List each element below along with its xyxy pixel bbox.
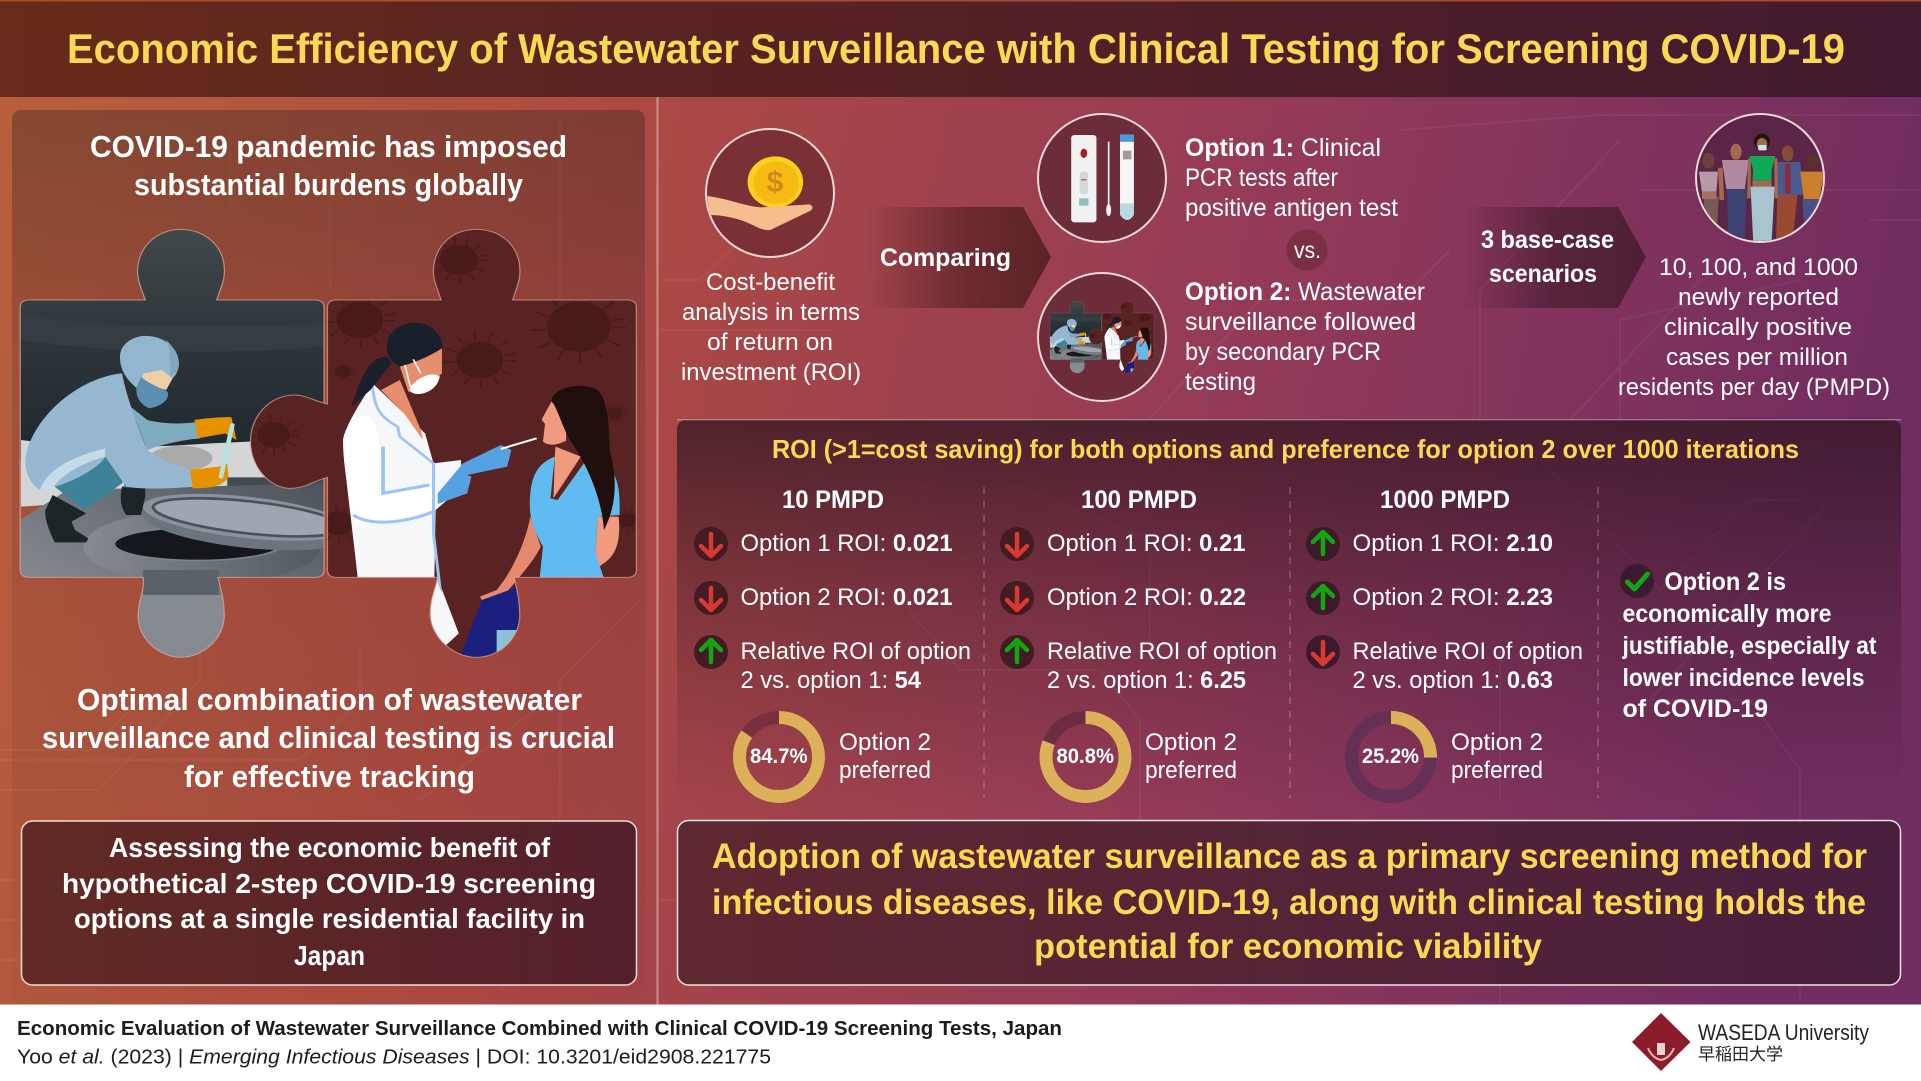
- column: 100 PMPD: [1000, 486, 1277, 796]
- icon: coin in hand: [706, 129, 834, 257]
- column: 10 PMPD: 10 PMPD: [782, 486, 884, 514]
- callout: study aim: Assessing the economic benefit of: [109, 832, 551, 863]
- column: 10 PMPD: Option 2: [839, 729, 931, 756]
- column: 10 PMPD: Option 2 ROI: 0.021: [740, 584, 952, 611]
- text: optimal combination: Optimal combination of wastewater: [77, 682, 582, 717]
- donut: 84.7 percent: 84.7%: [750, 745, 808, 768]
- column: 10 PMPD: Option 1 ROI: 0.021: [740, 530, 952, 557]
- callout: study aim: Japan: [294, 940, 365, 971]
- column: 1000 PMPD: preferred: [1451, 757, 1543, 784]
- text: option 2: by secondary PCR: [1185, 338, 1381, 366]
- arrow: comparing: [866, 207, 1051, 308]
- logo: Waseda University: WASEDA University: [1698, 1020, 1869, 1045]
- heading: pandemic burden: COVID-19 pandemic has imposed: [90, 129, 567, 164]
- heading: ROI results: ROI (>1=cost saving) for both options and preference for option 2 over 1000 iterations: [772, 434, 1799, 464]
- callout: study aim: hypothetical 2-step COVID-19 screening: [62, 868, 596, 899]
- text: option 1: Option 1: Clinical: [1185, 134, 1381, 162]
- text: scenario description: residents per day (PMPD): [1618, 374, 1890, 401]
- text: option 2: testing: [1185, 368, 1256, 396]
- icon: up arrow option 1: [1306, 527, 1340, 561]
- icon: down arrow option 1: [1000, 527, 1034, 561]
- icon: down arrow option 2: [1000, 581, 1034, 615]
- icon: option 2 puzzle thumbnail: [1038, 273, 1166, 401]
- column: 1000 PMPD: Option 2 ROI: 2.23: [1352, 584, 1553, 611]
- column: 1000 PMPD: [1306, 486, 1583, 796]
- icon: group of people: [1696, 114, 1824, 242]
- icon: check mark: [1620, 564, 1654, 598]
- column: 1000 PMPD: 1000 PMPD: [1380, 486, 1510, 514]
- text: cost-benefit analysis: of return on: [707, 329, 833, 356]
- icon: up arrow option 2: [1306, 581, 1340, 615]
- column: 100 PMPD: Option 2: [1145, 729, 1237, 756]
- citation title: Economic Evaluation of Wastewater Surveillance Combined with Clinical COVID-19 Screening Tests, Japan: [17, 1018, 1062, 1040]
- arrow: 3 base-case scenarios: [1462, 207, 1646, 308]
- text: option 1: [1185, 134, 1398, 222]
- icon: down arrow relative ROI: [1306, 635, 1340, 669]
- logo: Waseda University: 早稲田大学: [1698, 1045, 1783, 1064]
- panel: left background context: [12, 110, 645, 1005]
- panel: ROI results: [677, 419, 1901, 810]
- callout: study aim: options at a single residential facility in: [74, 903, 585, 934]
- column: 100 PMPD: Option 1 ROI: 0.21: [1047, 530, 1246, 557]
- text: scenario description: clinically positive: [1664, 314, 1852, 341]
- icon: down arrow option 1: [694, 527, 728, 561]
- arrow: comparing: Comparing: [880, 244, 1011, 272]
- text: cost-benefit analysis: investment (ROI): [681, 359, 861, 386]
- conclusion: option 2 justification: [1620, 564, 1877, 723]
- text: scenario description: 10, 100, and 1000: [1659, 254, 1858, 281]
- column: 100 PMPD: preferred: [1145, 757, 1237, 784]
- donut: 25.2 percent: 25.2%: [1362, 745, 1419, 768]
- text: cost-benefit analysis: Cost-benefit: [706, 269, 835, 296]
- text: optimal combination: for effective tracking: [184, 759, 475, 794]
- text: cost-benefit analysis: analysis in terms: [682, 299, 860, 326]
- column: 100 PMPD: Option 2 ROI: 0.22: [1047, 584, 1246, 611]
- column: 100 PMPD: 100 PMPD: [1081, 486, 1197, 514]
- icon: coin in hand: $: [767, 166, 784, 199]
- text: option 2: Option 2: Wastewater: [1185, 278, 1425, 306]
- footer: [0, 1004, 1921, 1081]
- text: cost-benefit analysis: [681, 269, 861, 386]
- logo: Waseda University: [1632, 1013, 1869, 1071]
- callout: study aim: [22, 821, 636, 985]
- text: option 1: PCR tests after: [1185, 164, 1338, 192]
- callout: main conclusion: [678, 820, 1900, 985]
- heading: pandemic burden: substantial burdens globally: [134, 167, 524, 202]
- callout: main conclusion: potential for economic viability: [1034, 927, 1543, 966]
- text: optimal combination: [42, 682, 615, 794]
- column: 1000 PMPD: Option 2: [1451, 729, 1543, 756]
- text: option 2: [1185, 278, 1425, 396]
- column: 1000 PMPD: 2 vs. option 1: 0.63: [1352, 667, 1553, 694]
- donut: 80.8 percent: 80.8%: [1056, 745, 1114, 768]
- donut: 80.8 percent: [1046, 718, 1125, 796]
- icon: up arrow relative ROI: [1000, 635, 1034, 669]
- icon: antigen test kit and PCR tube: [1038, 114, 1166, 242]
- heading: pandemic burden: [90, 129, 567, 202]
- icon: down arrow option 2: [694, 581, 728, 615]
- conclusion: option 2 justification: economically more: [1622, 600, 1832, 628]
- badge: vs: [1286, 230, 1328, 270]
- column: 100 PMPD: 2 vs. option 1: 6.25: [1047, 667, 1246, 694]
- conclusion: option 2 justification: lower incidence levels: [1622, 664, 1864, 692]
- column: 1000 PMPD: Option 1 ROI: 2.10: [1352, 530, 1553, 557]
- conclusion: option 2 justification: justifiable, especially at: [1622, 632, 1877, 660]
- header bar: [0, 0, 1921, 97]
- callout: main conclusion: Adoption of wastewater surveillance as a primary screening method for: [712, 837, 1867, 876]
- donut: 84.7 percent: [740, 718, 818, 796]
- conclusion: option 2 justification: of COVID-19: [1622, 695, 1768, 723]
- illustration: puzzle of wastewater sampling and clinical swab: [17, 227, 640, 662]
- column: 100 PMPD: Relative ROI of option: [1047, 638, 1277, 665]
- panel: cost-benefit analysis: [681, 129, 861, 386]
- title: Economic Efficiency of Wastewater Surveillance with Clinical Testing for Screening COVID-19: [67, 25, 1845, 72]
- text: scenario description: cases per million: [1666, 344, 1848, 371]
- text: option 1: positive antigen test: [1185, 194, 1398, 222]
- text: optimal combination: surveillance and clinical testing is crucial: [42, 720, 615, 755]
- text: scenario description: newly reported: [1678, 284, 1839, 311]
- column: 10 PMPD: [694, 486, 971, 796]
- column: 10 PMPD: 2 vs. option 1: 54: [740, 667, 922, 694]
- donut: 25.2 percent: [1352, 718, 1430, 796]
- arrow: 3 base-case scenarios: 3 base-case: [1481, 226, 1614, 254]
- conclusion: option 2 justification: Option 2 is: [1664, 568, 1786, 596]
- text: option 2: surveillance followed: [1185, 308, 1416, 336]
- text: scenario description: [1618, 254, 1890, 401]
- arrow: 3 base-case scenarios: scenarios: [1489, 260, 1597, 288]
- badge: vs: vs.: [1294, 237, 1321, 263]
- column: 10 PMPD: Relative ROI of option: [740, 638, 971, 665]
- column: 10 PMPD: preferred: [839, 757, 931, 784]
- icon: up arrow relative ROI: [694, 635, 728, 669]
- citation details: Yoo et al. (2023) | Emerging Infectious Diseases | DOI: 10.3201/eid2908.221775: [17, 1046, 771, 1068]
- callout: main conclusion: infectious diseases, like COVID-19, along with clinical testing holds the: [712, 883, 1866, 922]
- column: 1000 PMPD: Relative ROI of option: [1352, 638, 1583, 665]
